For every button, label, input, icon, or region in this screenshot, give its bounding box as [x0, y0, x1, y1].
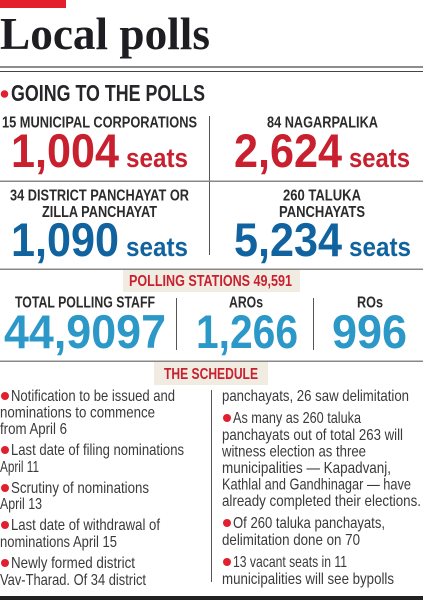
schedule: right column: municipalities — Kapadvanj, — [222, 460, 391, 477]
stat: AROs: AROs — [229, 294, 263, 312]
panel: nagarpalika: 2,624 — [234, 124, 342, 177]
schedule: left column: from April 6 — [0, 421, 67, 438]
schedule: left column: nominations April 15 — [0, 534, 117, 551]
schedule: right column: As many as 260 taluka — [233, 410, 361, 427]
schedule: left column: nominations to commence — [0, 404, 155, 422]
stat: ROs: 996 — [332, 305, 407, 358]
panel: municipal corporations: seats — [126, 143, 188, 173]
panel: district panchayat — [10, 188, 189, 266]
schedule: left column: Scrutiny of nominations — [11, 480, 149, 497]
schedule: left column: April 11 — [0, 459, 39, 476]
schedule: left column: Vav-Tharad. Of 34 district — [0, 572, 146, 589]
red accent bar — [0, 0, 66, 8]
schedule: left column: April 13 — [0, 496, 42, 513]
schedule: right column: Of 260 taluka panchayats, — [233, 515, 385, 532]
schedule: left column: Last date of filing nominations — [11, 442, 184, 459]
panel: taluka panchayats: seats — [349, 232, 411, 262]
panel: taluka panchayats — [234, 188, 411, 266]
stat: total polling staff: 44,9097 — [4, 305, 166, 358]
banner: the schedule — [154, 362, 268, 385]
panel: municipal corporations: 15 MUNICIPAL CORPORATIONS — [2, 114, 197, 132]
schedule: left column: Notification to be issued and — [11, 388, 175, 405]
stat: AROs: 1,266 — [196, 305, 298, 358]
heading: going to the polls: GOING TO THE POLLS — [11, 80, 205, 106]
panel: district panchayat: 34 DISTRICT PANCHAYAT OR — [10, 188, 189, 204]
title: Local polls — [0, 9, 210, 59]
schedule: right column: witness election as three — [221, 444, 366, 460]
panel: taluka panchayats: 260 TALUKA — [283, 188, 361, 204]
schedule: left column: Last date of withdrawal of — [11, 517, 160, 534]
panel: district panchayat: ZILLA PANCHAYAT — [42, 204, 157, 221]
panel: district panchayat: seats — [126, 232, 188, 262]
schedule: right column: delimitation done on 70 — [222, 532, 360, 549]
banner: polling stations — [123, 270, 300, 292]
banner: the schedule: THE SCHEDULE — [164, 366, 258, 383]
banner: polling stations: POLLING STATIONS 49,591 — [129, 273, 292, 290]
schedule: right column: municipalities will see bypolls — [222, 571, 394, 588]
panel: municipal corporations — [2, 114, 197, 177]
schedule: right column: 13 vacant seats in 11 — [233, 554, 347, 571]
panel: taluka panchayats: 5,234 — [234, 213, 342, 266]
panel: nagarpalika: seats — [349, 143, 410, 173]
panel: nagarpalika: 84 NAGARPALIKA — [267, 114, 378, 132]
stat: total polling staff: TOTAL POLLING STAFF — [15, 294, 155, 312]
panel: municipal corporations: 1,004 — [11, 124, 119, 177]
panel: taluka panchayats: PANCHAYATS — [279, 204, 365, 221]
schedule: left column — [0, 388, 184, 589]
panel: nagarpalika — [234, 114, 410, 177]
schedule: right column — [221, 388, 421, 588]
schedule: left column: Newly formed district — [11, 555, 135, 572]
stat: ROs: ROs — [357, 294, 383, 312]
panel: district panchayat: 1,090 — [11, 213, 119, 266]
